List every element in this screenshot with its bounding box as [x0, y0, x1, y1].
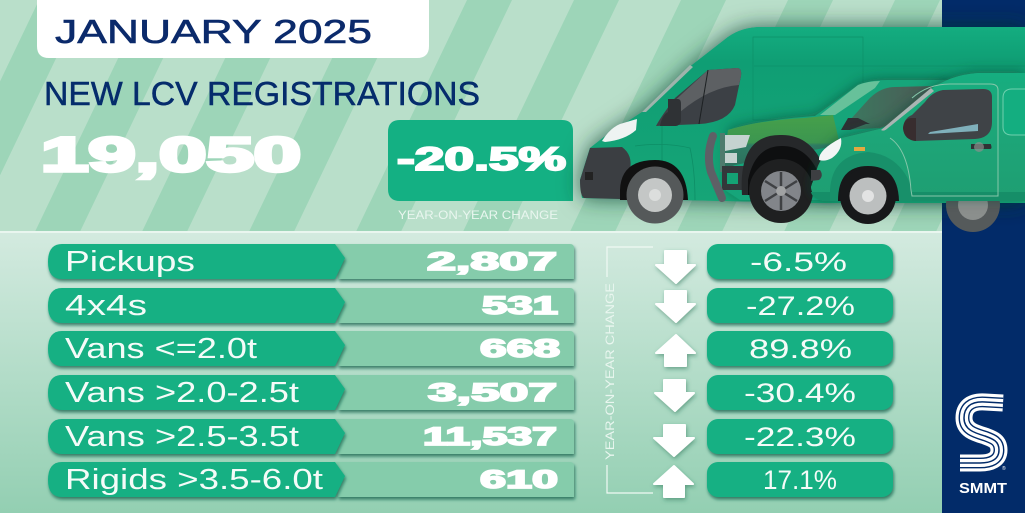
pill: Rigids change	[707, 462, 893, 497]
row: Rigids 3.5-6.0t: Rigids >3.5-6.0t	[65, 464, 323, 496]
date tab: JANUARY 2025	[55, 13, 372, 50]
total change badge: -20.5%	[397, 141, 566, 177]
van: large panel van	[580, 27, 1025, 203]
small van	[811, 73, 1025, 201]
data table: segment rows	[48, 244, 574, 497]
row: Vans up to 2.0t: Vans <=2.0t	[65, 333, 257, 365]
row: Pickups: 2,807	[427, 248, 557, 276]
row: Pickups: Pickups	[65, 246, 195, 278]
pickup truck	[709, 80, 960, 223]
row: Vans 2.5-3.5t	[48, 419, 574, 454]
sidebar: navy band	[942, 0, 1025, 513]
background: lower gradient area	[0, 233, 942, 513]
arrow: down	[654, 425, 694, 456]
row: 4x4s: 531	[482, 292, 558, 320]
row: 4x4s: 4x4s	[65, 290, 147, 322]
change pills	[707, 244, 893, 497]
row: Rigids 3.5-6.0t	[48, 462, 574, 497]
row: 4x4s	[48, 288, 574, 323]
badge caption: YEAR-ON-YEAR CHANGE	[398, 210, 558, 222]
wheel: small van	[840, 168, 896, 224]
row: Vans up to 2.0t: 668	[480, 335, 560, 363]
pill: Vans up to 2.0t change: 89.8%	[749, 334, 852, 364]
arrow: down	[655, 380, 694, 411]
row: Vans 2.5-3.5t: 11,537	[423, 423, 557, 451]
total registrations: 19,050	[41, 129, 301, 182]
row: Vans 2.0-2.5t: 3,507	[428, 379, 557, 407]
pill: Vans 2.5-3.5t change	[707, 419, 893, 454]
arrow: down	[656, 291, 695, 322]
background: striped upper area	[0, 0, 942, 232]
arrow: down	[656, 251, 695, 283]
wheel: large van	[626, 166, 684, 224]
pill: Pickups change: -6.5%	[750, 247, 847, 277]
heading: NEW LCV REGISTRATIONS	[44, 75, 480, 112]
pill: Vans 2.0-2.5t change	[707, 375, 893, 410]
pill: 4x4s change	[707, 288, 893, 323]
vehicles illustration	[580, 27, 1025, 232]
row: Pickups	[48, 244, 574, 279]
pill: Vans 2.5-3.5t change: -22.3%	[744, 422, 856, 452]
bracket and vertical caption: YEAR-ON-YEAR CHANGE	[603, 283, 617, 460]
row: Vans 2.5-3.5t: Vans >2.5-3.5t	[65, 421, 299, 453]
pill: Vans up to 2.0t change	[707, 331, 893, 366]
arrows	[654, 251, 695, 497]
rear wheel behind small van	[946, 178, 1000, 232]
arrow: up	[656, 335, 695, 366]
row: Vans 2.0-2.5t: Vans >2.0-2.5t	[65, 377, 299, 409]
pill: Vans 2.0-2.5t change: -30.4%	[744, 378, 856, 408]
bracket and vertical caption	[603, 247, 653, 493]
pill: Rigids change: 17.1%	[763, 465, 837, 495]
arrow: up	[654, 466, 693, 497]
logo: SMMT: ®	[1002, 465, 1006, 472]
logo: SMMT: SMMT	[959, 480, 1007, 497]
pill: 4x4s change: -27.2%	[746, 291, 855, 321]
row: Vans 2.0-2.5t	[48, 375, 574, 410]
row: Vans up to 2.0t	[48, 331, 574, 366]
total change badge	[388, 120, 573, 201]
date tab	[37, 0, 429, 58]
pill: Pickups change	[707, 244, 893, 279]
logo: SMMT	[959, 402, 1007, 497]
row: Rigids 3.5-6.0t: 610	[480, 466, 558, 494]
